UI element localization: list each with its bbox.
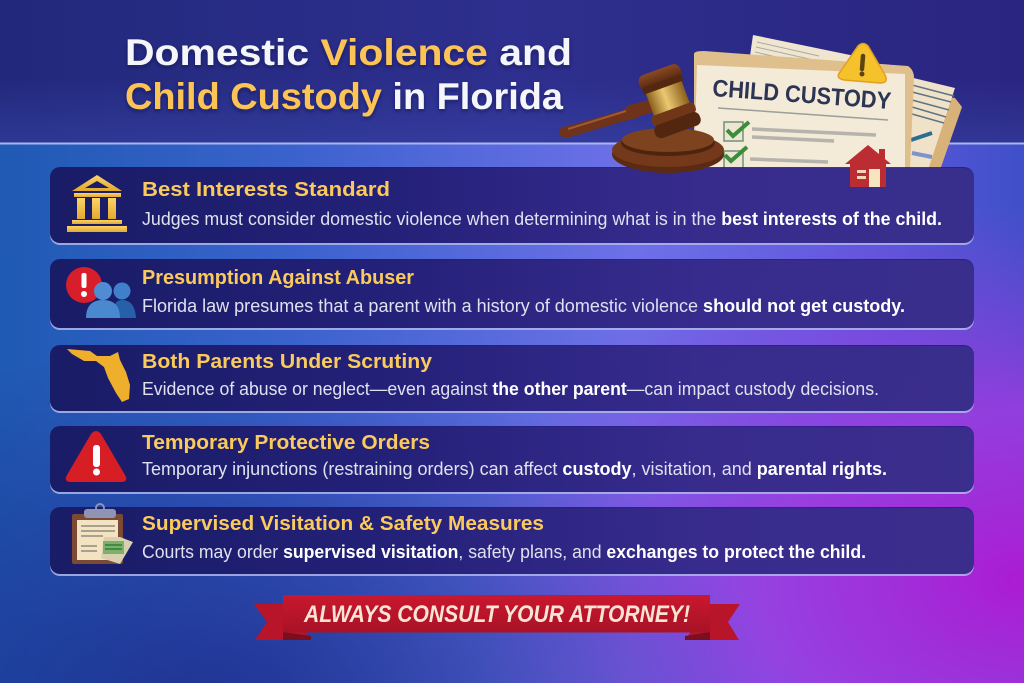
illustration: gavel — [559, 61, 724, 173]
body text: Evidence of abuse or neglect—even against the other parent—can impact custody decisions. — [142, 379, 879, 399]
warning sign — [838, 44, 886, 83]
ribbon tails — [254, 604, 740, 640]
heading: Supervised Visitation & Safety Measures — [142, 513, 544, 535]
icon: courthouse — [67, 175, 127, 232]
heading: Temporary Protective Orders — [142, 432, 430, 454]
heading: Presumption Against Abuser — [142, 267, 414, 289]
back papers — [748, 35, 962, 170]
banner — [254, 595, 740, 640]
panel: both parents under scrutiny — [50, 345, 974, 413]
icon: alert and people — [66, 267, 136, 318]
document heading: CHILD CUSTODY — [712, 75, 892, 115]
icon: house — [845, 145, 891, 187]
heading: Both Parents Under Scrutiny — [142, 351, 433, 373]
title: Domestic Violence and — [125, 32, 572, 73]
body text: Florida law presumes that a parent with a history of domestic violence should not get custody. — [142, 296, 905, 316]
head — [635, 61, 702, 140]
checkmarks — [724, 122, 749, 170]
panel: temporary protective orders — [50, 426, 974, 494]
body text: Judges must consider domestic violence when determining what is in the best interests of the child. — [142, 209, 942, 229]
body text: Courts may order supervised visitation, safety plans, and exchanges to protect the child. — [142, 542, 866, 562]
panel: supervised visitation — [50, 504, 974, 576]
header band — [0, 0, 1024, 144]
panel: best interests standard — [50, 167, 974, 245]
banner text: ALWAYS CONSULT YOUR ATTORNEY! — [303, 601, 690, 628]
icon: clipboard — [72, 504, 133, 564]
title — [125, 32, 572, 117]
sound block — [612, 128, 724, 173]
panel: presumption against abuser — [50, 259, 974, 330]
title: Child Custody in Florida — [125, 76, 563, 117]
main document — [694, 65, 905, 170]
ribbon body — [283, 595, 710, 632]
icon: florida map — [67, 349, 130, 402]
illustration: child custody documents — [694, 35, 962, 170]
document lines — [718, 108, 888, 162]
icon: warning triangle — [66, 431, 126, 482]
folder — [694, 51, 914, 170]
heading: Best Interests Standard — [142, 179, 390, 201]
body text: Temporary injunctions (restraining orders) can affect custody, visitation, and parental rights. — [142, 459, 887, 479]
handle — [559, 100, 654, 138]
